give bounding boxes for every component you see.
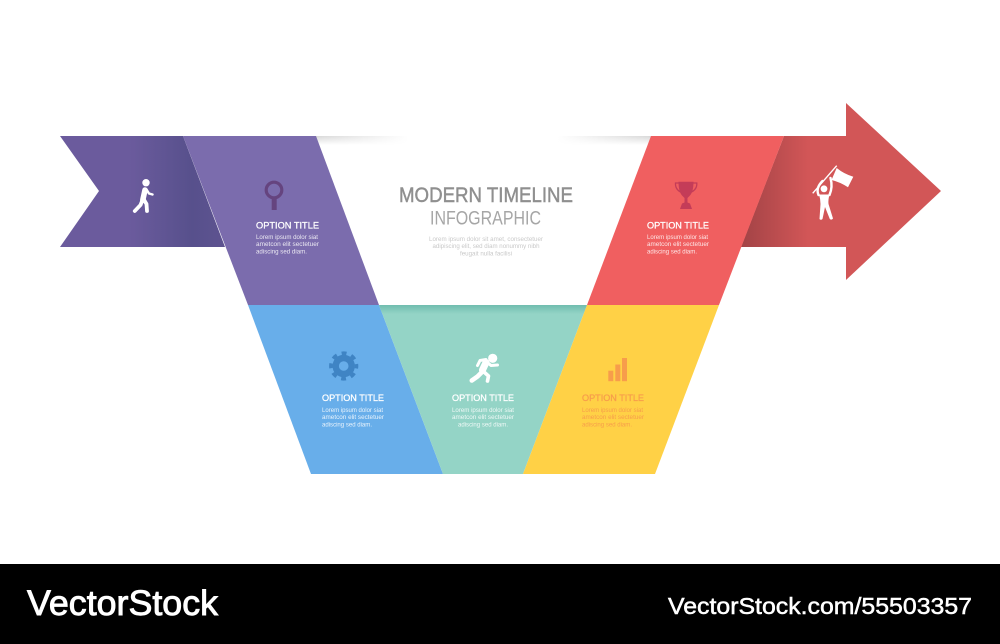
text: option body 2: Lorem ipsum dolor siat [322, 408, 383, 414]
text: option title 5: OPTION TITLE [647, 220, 709, 230]
heading: modern timeline: MODERN TIMELINE [399, 184, 573, 207]
text: option title 2: OPTION TITLE [322, 393, 384, 403]
text: option body 4: Lorem ipsum dolor siat [582, 408, 643, 414]
text: option body 3: adiscing sed diam. [458, 422, 508, 428]
text: option body 1: adiscing sed diam. [256, 250, 307, 256]
text: intro paragraph: Lorem ipsum dolor sit amet, consectetuer [429, 236, 544, 243]
text: option body 2: ametcon elit sectetuer [322, 415, 384, 421]
text: option body 2 [322, 408, 384, 428]
footer bar [0, 564, 1000, 644]
text: intro paragraph: adipiscing elit, sed diam nonummy nibh [432, 243, 540, 250]
footer logo: VectorStock [27, 584, 219, 623]
text: option body 3: ametcon elit sectetuer [452, 415, 514, 421]
text: option body 5: ametcon elit sectetuer [647, 242, 709, 248]
icon: gear [331, 353, 357, 379]
text: option body 1: ametcon elit sectetuer [256, 242, 319, 248]
text: option body 1: Lorem ipsum dolor siat [256, 235, 318, 241]
panel: step 3 teal [379, 305, 587, 474]
text: option title 3: OPTION TITLE [452, 393, 514, 403]
footer url: VectorStock.com/55503357 [668, 593, 972, 619]
right arrow head [741, 103, 941, 280]
text: option body 4: ametcon elit sectetuer [582, 415, 644, 421]
text: option body 4: adiscing sed diam. [582, 422, 632, 428]
text: option body 4 [582, 408, 644, 428]
text: option body 2: adiscing sed diam. [322, 422, 372, 428]
left ribbon tail [60, 136, 225, 247]
icon: bar chart [608, 358, 627, 381]
panel: step 2 blue [248, 305, 443, 474]
text: option title 4: OPTION TITLE [582, 393, 644, 403]
icon: person with flag [813, 166, 853, 220]
text: option body 1 [256, 235, 319, 256]
icon: magnifier [266, 182, 282, 210]
icon: walking person [135, 179, 152, 211]
panel: step 5 red [587, 136, 784, 305]
icon: running person [472, 354, 498, 381]
text: option body 5: Lorem ipsum dolor siat [647, 235, 708, 241]
heading: infographic: INFOGRAPHIC [430, 208, 541, 230]
text: option body 3: Lorem ipsum dolor siat [452, 408, 514, 414]
top shadow: centre panel [316, 136, 651, 145]
panel: step 4 yellow [523, 305, 719, 474]
text: option body 5 [647, 235, 709, 256]
icon: trophy [675, 182, 697, 209]
panel: step 1 purple [183, 136, 379, 305]
text: intro paragraph [429, 236, 544, 258]
text: option body 3 [452, 408, 514, 428]
text: intro paragraph: feugait nulla facilisi [460, 250, 512, 258]
text: option title 1: OPTION TITLE [256, 220, 319, 230]
text: option body 5: adiscing sed diam. [647, 250, 697, 256]
